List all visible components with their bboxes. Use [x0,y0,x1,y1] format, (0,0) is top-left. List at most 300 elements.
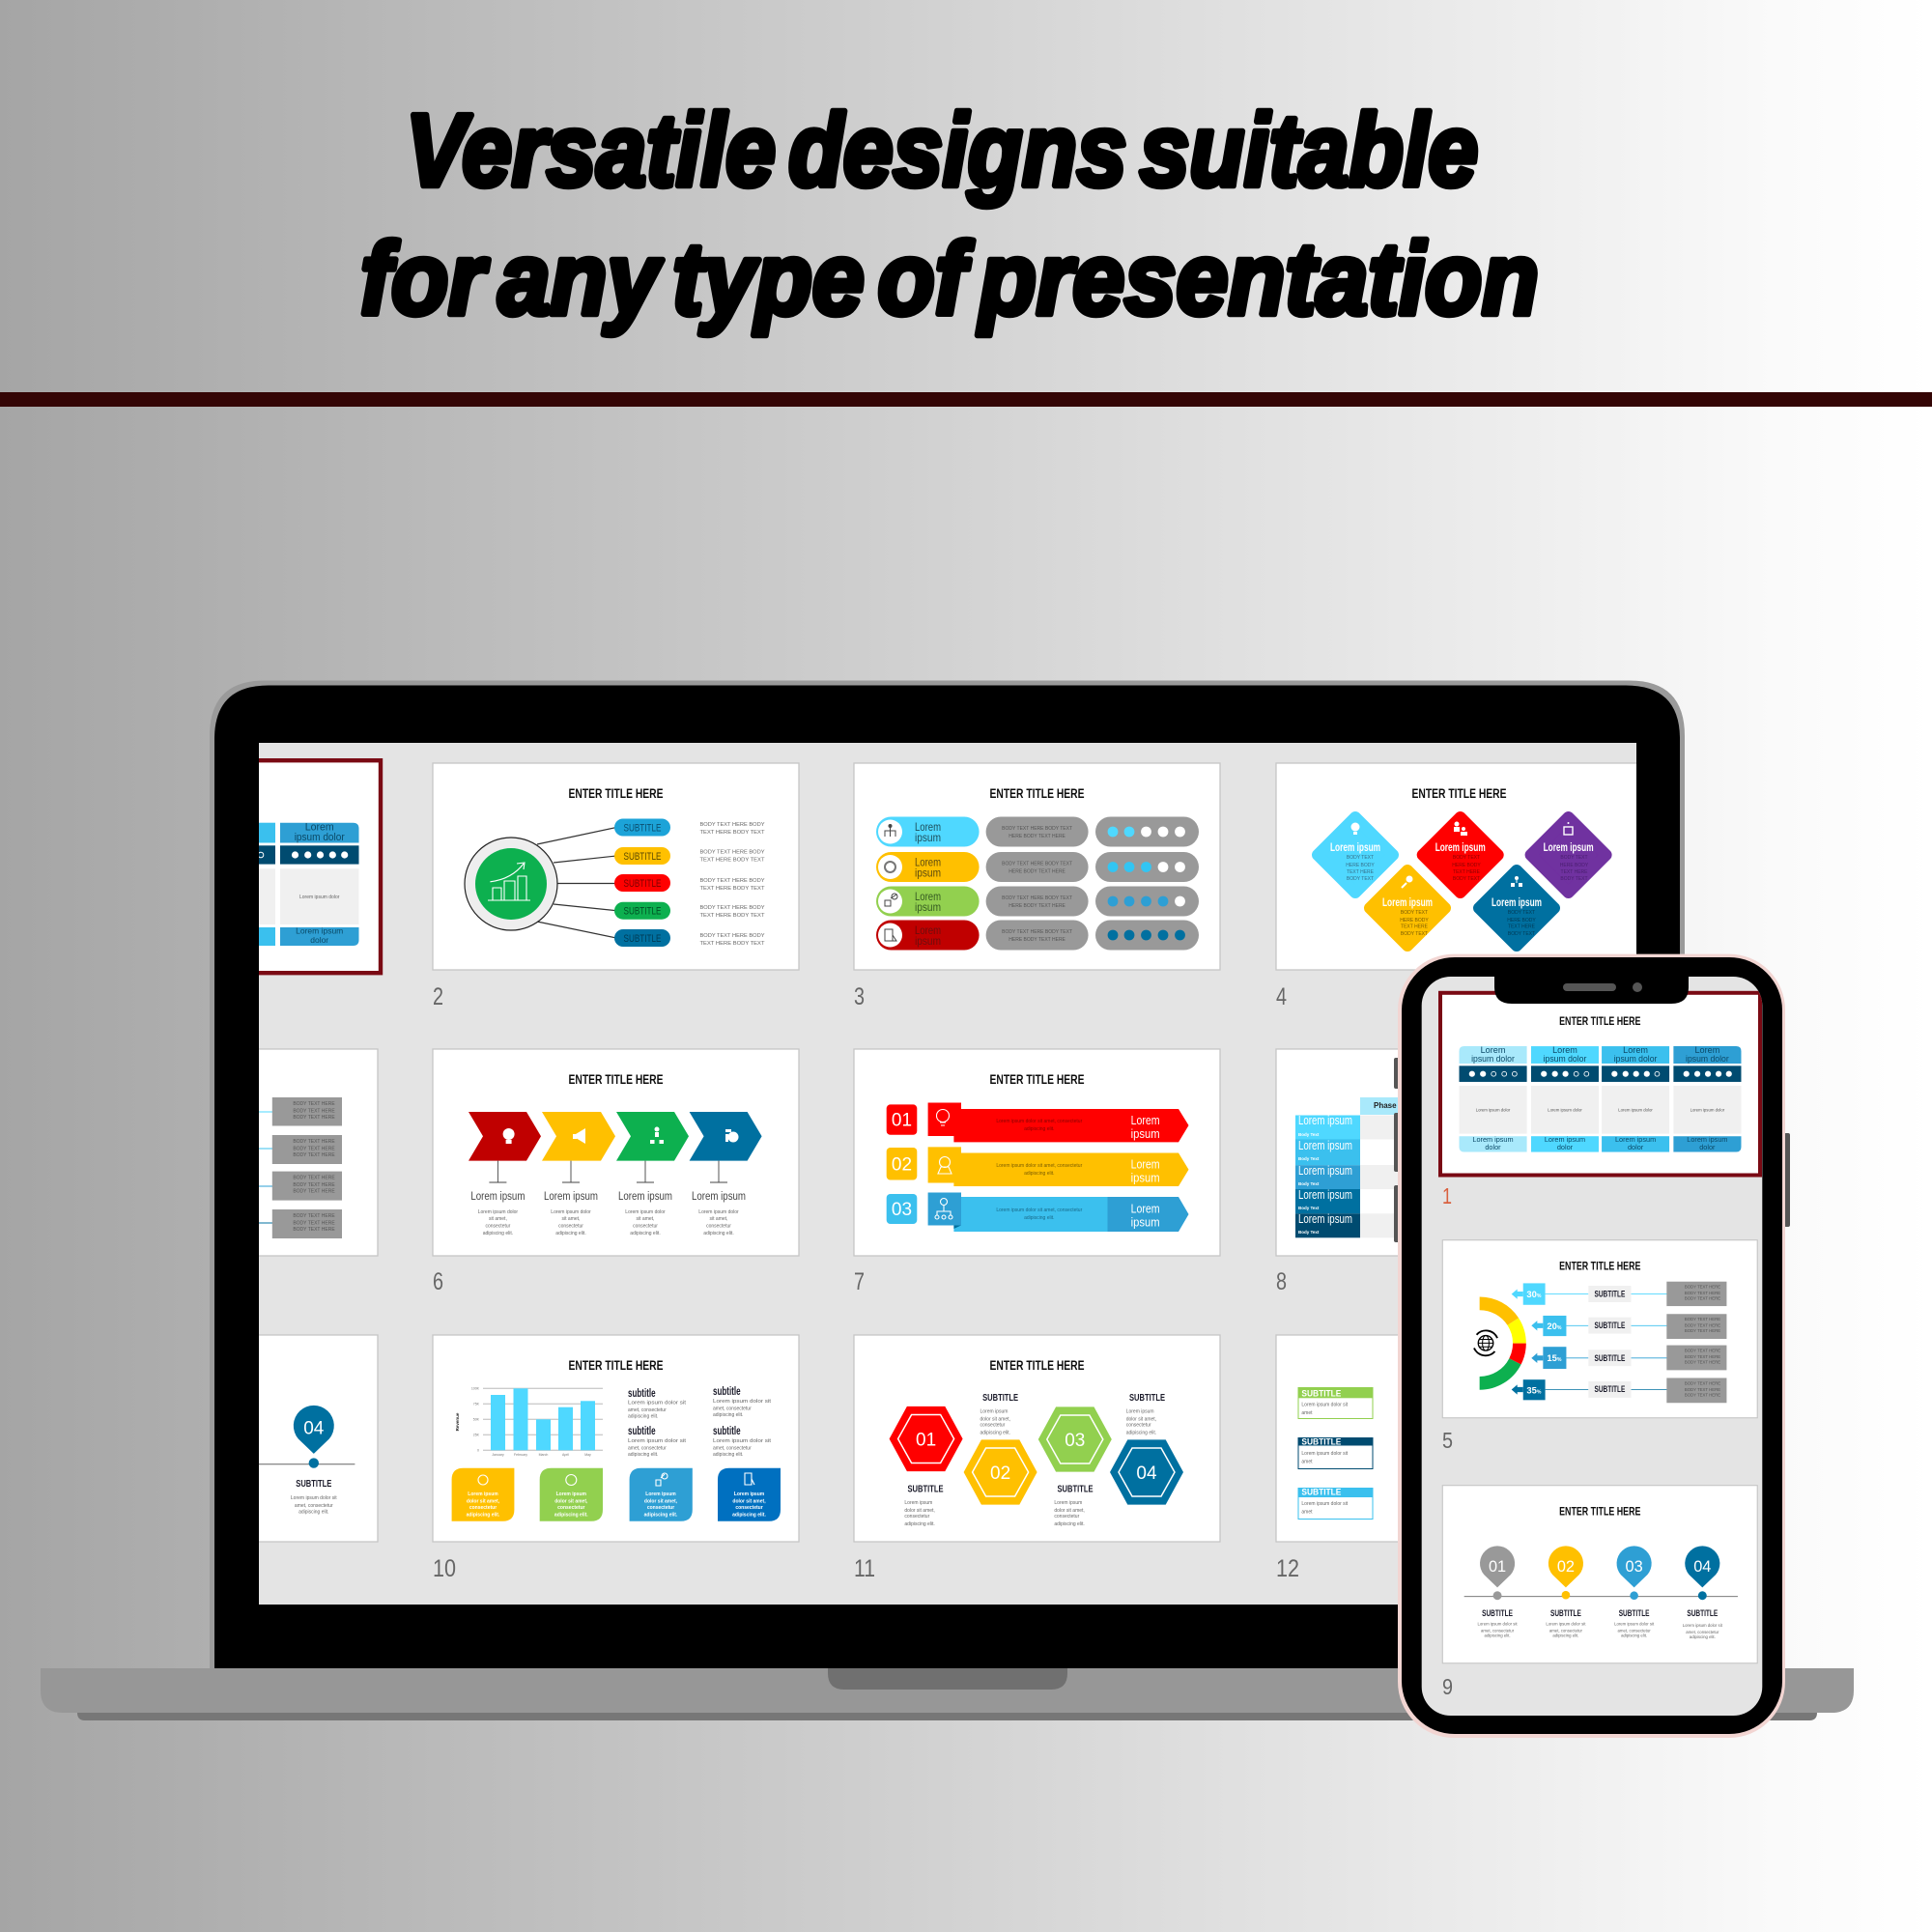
pin 02: amet, consectetur [1549,1628,1583,1633]
step 2 text: consectetur [558,1223,583,1229]
row 2: BODY TEXT HERE BODY TEXT [1002,862,1072,867]
phone slide number 9: 9 [1442,1674,1453,1699]
title: for any type of presentation [360,222,1539,336]
chevron row [469,1112,762,1161]
row labels: Body Text [1298,1181,1320,1186]
arrow 02 [887,1147,1188,1186]
step 4 text: adipiscing elit. [703,1231,734,1236]
subtitle text blocks: subtitle [628,1386,656,1400]
card blue: Lorem ipsum [645,1492,676,1497]
pin 01: SUBTITLE [1482,1608,1513,1618]
phone [1394,954,1790,1738]
hexagon 02: consectetur [980,1422,1006,1428]
box green: Lorem ipsum dolor sit [1301,1403,1349,1408]
subtitle pills: SUBTITLE [624,823,661,835]
arrow 03: Lorem ipsum dolor sit amet, consectetur [996,1208,1083,1213]
hexagon 02: 02 [990,1463,1010,1484]
row labels: Lorem ipsum [1298,1138,1352,1152]
body text [699,822,765,947]
pin 02: 02 [1557,1558,1575,1576]
hexagon 03: 03 [1065,1431,1085,1451]
laptop base lower strip [77,1713,1817,1720]
step 1 text: consectetur [485,1223,511,1229]
hexagon 02: dolor sit amet, [980,1416,1010,1422]
body text: TEXT HERE BODY TEXT [699,886,765,892]
hexagon 03: consectetur [1054,1514,1080,1520]
row 1: BODY TEXT HERE BODY TEXT [1002,826,1072,832]
hexagon 03: adipiscing elit. [1054,1521,1085,1527]
card yellow: consectetur [469,1505,497,1511]
pin 02: Lorem ipsum dolor sit [1546,1622,1586,1627]
pin 02: adipiscing elit. [1552,1634,1578,1638]
card yellow: dolor sit amet, [467,1499,500,1505]
diamond cyan: BODY TEXT [1347,855,1374,861]
subtitle pills: SUBTITLE [624,851,661,863]
arrow 01: Lorem [1131,1113,1160,1127]
column 2: Lorem ipsum [1545,1135,1585,1144]
bar chart: 0 [477,1449,479,1453]
pin 01: adipiscing elit. [1485,1634,1511,1638]
laptop bezel edge [210,680,1685,1668]
hexagon 04: Lorem ipsum [1126,1408,1154,1414]
column 2: dolor [1557,1143,1574,1151]
phone slide 5 [1442,1240,1757,1418]
diamond cyan [1318,817,1393,893]
row 2 [876,852,1199,882]
bar chart: 75K [473,1403,480,1406]
pin 01: 01 [1489,1558,1506,1576]
body text: TEXT HERE BODY TEXT [699,913,765,919]
row 1: Lorem [915,820,941,834]
selection border [259,758,383,976]
subtitle text blocks: Lorem ipsum dolor sit [628,1438,687,1444]
tag 15 percent: BODY TEXT HERE [1685,1354,1720,1359]
arrow 03: adipiscing elit. [1024,1215,1055,1221]
gray text boxes: BODY TEXT HERE [293,1109,335,1115]
card green: dolor sit amet, [554,1499,588,1505]
arrow 03: 03 [892,1200,912,1220]
phone slide 1 [1440,993,1760,1175]
pin 02 [1546,1546,1586,1638]
hexagon 03: SUBTITLE [1057,1484,1094,1495]
slide numbers: 12 [1276,1555,1299,1582]
body text: TEXT HERE BODY TEXT [699,941,765,947]
diamond cyan: BODY TEXT [1347,876,1374,882]
subtitle text blocks: amet, consectetur [713,1445,752,1451]
slide 10: chart and cards [433,1335,799,1542]
tag 20 percent [1531,1314,1726,1339]
card dark blue: dolor sit amet, [732,1499,766,1505]
slide numbers: 6 [433,1268,443,1295]
diamond blue: HERE BODY [1507,918,1536,923]
slide 9 partial: Lorem ipsum dolor sit [212,1497,258,1503]
column 1: ipsum dolor [1471,1054,1515,1065]
arrow 01: ipsum [1131,1126,1160,1141]
subtitle text blocks: Lorem ipsum dolor sit [628,1401,687,1406]
phone slide 9: ENTER TITLE HERE [1559,1506,1641,1519]
slide 10: chart and cards: ENTER TITLE HERE [568,1358,663,1373]
column 3 [259,823,275,946]
row 3: BODY TEXT HERE BODY TEXT [1002,895,1072,901]
card green: adipiscing elit. [554,1513,588,1519]
phone screen [1422,977,1762,1716]
diamond blue: BODY TEXT [1508,931,1535,937]
body text: BODY TEXT HERE BODY [699,822,765,828]
tag 35 percent: BODY TEXT HERE [1685,1387,1720,1392]
pin 04: amet, consectetur [295,1503,333,1509]
subtitle text blocks: adipiscing elit. [628,1452,658,1458]
phone pink edge [1398,954,1785,1738]
pin 01: Lorem ipsum dolor sit [1478,1622,1518,1627]
diamond yellow [1370,870,1445,946]
diamond cyan: TEXT HERE [1347,869,1375,875]
step 2 text: sit amet, [562,1216,580,1222]
diamond red: BODY TEXT [1453,855,1480,861]
tag 35 percent: BODY TEXT HERE [1685,1392,1720,1397]
semicircle gauge [1480,1303,1520,1383]
slide 7: numbered arrows: ENTER TITLE HERE [989,1072,1084,1087]
subtitle text blocks: subtitle [713,1384,741,1398]
arrow 02: Lorem [1131,1157,1160,1171]
diamond blue [1479,870,1554,946]
slide numbers: 4 [1276,983,1287,1010]
diamond yellow: BODY TEXT [1401,931,1428,937]
step 3 text [618,1191,672,1236]
column 4: Lorem ipsum dolor [1690,1107,1725,1112]
column 4: Lorem [1694,1045,1719,1056]
gray text boxes: BODY TEXT HERE [293,1146,335,1151]
row labels: Body Text [1298,1156,1320,1161]
hexagon 03 [1038,1406,1112,1527]
subtitle text blocks: subtitle [713,1424,741,1437]
column 4: ipsum dolor [295,832,345,843]
hexagon 04: SUBTITLE [1129,1392,1165,1404]
pin 01: amet, consectetur [1481,1628,1515,1633]
hexagon 01: dolor sit amet, [904,1508,935,1514]
column 3: ipsum dolor [1614,1054,1657,1065]
body text: TEXT HERE BODY TEXT [699,830,765,836]
slide 11: hexagons: ENTER TITLE HERE [989,1358,1084,1373]
arrow 01: adipiscing elit. [1024,1126,1055,1132]
subtitle pills: SUBTITLE [624,906,661,918]
row 3 [876,887,1199,916]
row 4: ipsum [915,934,941,948]
chevron icons [503,1126,738,1144]
arrow 01 [887,1103,1188,1142]
column 2: ipsum dolor [1544,1054,1586,1065]
diamond purple: HERE BODY [1560,863,1589,868]
box green: SUBTITLE [1301,1389,1341,1399]
pin 04 [1683,1546,1723,1639]
hexagon 01: adipiscing elit. [904,1521,935,1527]
pin 03: Lorem ipsum dolor sit [1614,1622,1655,1627]
column 2: Lorem ipsum dolor [1548,1107,1582,1112]
step 2 text [544,1191,598,1236]
diamond red: BODY TEXT [1453,876,1480,882]
step 1 text [470,1191,525,1236]
slide 3: rating pills: ENTER TITLE HERE [989,786,1084,801]
column 4: Lorem [305,821,334,833]
column 4 [280,821,359,946]
gray text boxes: BODY TEXT HERE [293,1182,335,1188]
column 3: Lorem ipsum [1615,1135,1656,1144]
pin 04: 04 [1693,1558,1711,1576]
column 4: Lorem ipsum [296,925,343,935]
card yellow: adipiscing elit. [467,1513,500,1519]
laptop trackpad notch [828,1668,1067,1690]
slide 2: hub and spokes [433,763,799,970]
bar chart: 25K [473,1434,480,1437]
diamond blue: BODY TEXT [1508,910,1535,916]
subtitle text blocks: amet, consectetur [628,1445,667,1451]
bar chart: May [584,1453,591,1457]
row 4: Lorem [915,923,941,937]
hexagon 04: 04 [1136,1463,1157,1484]
arrow 03: ipsum [1131,1215,1160,1229]
step 2 text: Lorem ipsum dolor [551,1209,591,1215]
column 4: dolor [310,935,328,945]
phone slide 1: ENTER TITLE HERE [1559,1015,1641,1028]
tag 15 percent: BODY TEXT HERE [1685,1359,1720,1364]
box navy [1298,1437,1373,1468]
pin 03: SUBTITLE [1619,1608,1650,1618]
slide 6: chevrons [433,1049,799,1256]
slide 9 partial [12,1335,378,1542]
tag 30 percent: BODY TEXT HERE [1685,1291,1720,1295]
pin 03: 03 [1626,1558,1643,1576]
hexagon 04 [1110,1392,1183,1505]
hexagon 03: dolor sit amet, [1054,1508,1085,1514]
pin 04: Lorem ipsum dolor sit [1683,1623,1723,1628]
step 3 text: adipiscing elit. [630,1231,661,1236]
column 1: Lorem ipsum [1472,1135,1514,1144]
card yellow: Lorem ipsum [468,1492,498,1497]
column 1: Lorem ipsum dolor [1476,1107,1511,1112]
card blue [630,1468,693,1521]
phase header [1360,1097,1418,1115]
step 3 text: Lorem ipsum [618,1191,672,1203]
gray text boxes: BODY TEXT HERE [293,1175,335,1180]
diamond purple: Lorem ipsum [1544,842,1594,854]
arrow 01: 01 [892,1111,912,1130]
hexagon 02: SUBTITLE [982,1392,1018,1404]
step 4 text: sit amet, [710,1216,727,1222]
bar chart: April [562,1453,569,1457]
box cyan: Lorem ipsum dolor sit [1301,1501,1349,1507]
pin 01 [1478,1546,1518,1638]
column 4 [1673,1045,1741,1152]
hexagon 01: consectetur [904,1514,930,1520]
pin 03: amet, consectetur [1618,1628,1651,1633]
hub circle [465,838,557,930]
slide 5 partial [12,1049,378,1256]
slide 12: subtitle boxes [1276,1335,1642,1542]
card blue: adipiscing elit. [644,1513,678,1519]
hexagon 04: consectetur [1126,1422,1151,1428]
tag 20 percent: BODY TEXT HERE [1685,1323,1720,1328]
slide numbers: 3 [854,983,865,1010]
diamond yellow: BODY TEXT [1401,910,1428,916]
column 2: Lorem [1552,1045,1577,1056]
column 3: Lorem [1623,1045,1648,1056]
diamond red [1423,817,1498,893]
column 3 [1602,1045,1669,1152]
phone slide number 5: 5 [1442,1428,1453,1453]
laptop base [41,1668,1854,1713]
pin 04: Lorem ipsum dolor sit [291,1495,337,1501]
phone side buttons [1394,1058,1790,1242]
divider band [0,392,1932,407]
tag 30 percent: SUBTITLE [1595,1290,1625,1299]
gray text boxes: BODY TEXT HERE [293,1101,335,1107]
step 2 text: adipiscing elit. [555,1231,586,1236]
box navy: amet [1301,1459,1313,1464]
subtitle pills: SUBTITLE [624,933,661,945]
slide 2: hub and spokes: ENTER TITLE HERE [568,786,663,801]
row 2: HERE BODY TEXT HERE [1009,869,1066,875]
row labels: Body Text [1298,1206,1320,1210]
row labels: Lorem ipsum [1298,1113,1352,1127]
tag 20 percent: BODY TEXT HERE [1685,1328,1720,1333]
tag 20 percent: 20% [1547,1321,1562,1332]
subtitle text blocks: amet, consectetur [628,1407,667,1413]
card yellow [452,1468,514,1521]
box green: amet [1301,1410,1313,1416]
column 4: ipsum dolor [1686,1054,1729,1065]
phone notch [1494,971,1689,1004]
subtitle text blocks: amet, consectetur [713,1406,752,1412]
slide numbers: 2 [433,983,443,1010]
row 2: ipsum [915,866,941,879]
subtitle text blocks [628,1384,772,1458]
hexagon 02: adipiscing elit. [980,1430,1010,1435]
pin 03 [1614,1546,1655,1638]
subtitle text blocks: Lorem ipsum dolor sit [713,1438,772,1444]
arrow 02: 02 [892,1155,912,1175]
tag 20 percent: BODY TEXT HERE [1685,1317,1720,1321]
pin 04 [291,1406,337,1515]
step 1 text: Lorem ipsum [470,1191,525,1203]
row 1: HERE BODY TEXT HERE [1009,834,1066,839]
tag 15 percent: BODY TEXT HERE [1685,1348,1720,1352]
subtitle text blocks: subtitle [628,1424,656,1437]
hexagon 02 [964,1392,1037,1505]
bar chart: Revenue [455,1412,460,1431]
diamond red: TEXT HERE [1453,869,1481,875]
connector lines [231,1112,272,1223]
title: Versatile designs suitable [406,94,1478,208]
diamond yellow: TEXT HERE [1401,923,1429,929]
row labels: Lorem ipsum [1298,1163,1352,1178]
diamond yellow: HERE BODY [1400,918,1429,923]
phone slide number 1: 1 [1442,1183,1452,1208]
body text: BODY TEXT HERE BODY [699,933,765,939]
slide 4: diamonds [1276,763,1642,970]
slide 7: numbered arrows [854,1049,1220,1256]
column 4: dolor [1699,1143,1716,1151]
column 1 [1459,1045,1527,1152]
box cyan: amet [1301,1509,1313,1515]
step 3 text: consectetur [633,1223,658,1229]
diamond yellow: Lorem ipsum [1382,897,1433,909]
camera [1633,982,1642,992]
laptop [8,680,1854,1720]
slide numbers: 7 [854,1268,865,1295]
row 1: ipsum [915,831,941,844]
hexagon 01: Lorem ipsum [904,1500,932,1506]
step 4 text: Lorem ipsum [692,1191,746,1203]
column 1: dolor [1485,1143,1501,1151]
tag 15 percent: 15% [1547,1353,1562,1364]
column 1: Lorem [1481,1045,1506,1056]
gray text boxes: BODY TEXT HERE [293,1227,335,1233]
subtitle text blocks: adipiscing elit. [628,1414,658,1420]
arrow 02: Lorem ipsum dolor sit amet, consectetur [996,1163,1083,1169]
subtitle pills [614,819,670,947]
step 4 text: consectetur [706,1223,731,1229]
column 3: dolor [1628,1143,1644,1151]
diamond cyan: Lorem ipsum [1330,842,1380,854]
tag 15 percent: SUBTITLE [1595,1353,1625,1363]
phase header: Phase [1374,1101,1397,1110]
table cells [1360,1115,1418,1237]
hexagon 03: Lorem ipsum [1054,1500,1082,1506]
title [360,94,1539,336]
tag 30 percent: 30% [1526,1290,1542,1300]
row labels: Body Text [1298,1230,1320,1235]
step 1 text: adipiscing elit. [483,1231,513,1236]
arrow 03 [887,1192,1188,1232]
bar chart [455,1387,603,1457]
laptop slide grid [8,760,1642,1582]
arrow 01: Lorem ipsum dolor sit amet, consectetur [996,1119,1083,1124]
slide 11: hexagons [854,1335,1220,1542]
slide 8: phase table [1276,1049,1642,1256]
tag 30 percent [1512,1282,1726,1306]
arrow 02: ipsum [1131,1171,1160,1184]
body text: TEXT HERE BODY TEXT [699,858,765,864]
pin 04: adipiscing elit. [1690,1634,1716,1639]
hexagon 04: dolor sit amet, [1126,1416,1156,1422]
phone slides [1440,993,1760,1699]
column 4: Lorem ipsum [1687,1135,1727,1144]
subtitle pills: SUBTITLE [624,878,661,890]
card green: consectetur [557,1505,585,1511]
tag 35 percent [1512,1378,1726,1403]
box green [1298,1387,1373,1418]
tag 35 percent: SUBTITLE [1595,1384,1625,1394]
step 1 text: sit amet, [489,1216,507,1222]
arrow 03: Lorem [1131,1202,1160,1215]
card dark blue: Lorem ipsum [734,1492,765,1497]
row 4: HERE BODY TEXT HERE [1009,937,1066,943]
arrow 02: adipiscing elit. [1024,1171,1055,1177]
gray text boxes: BODY TEXT HERE [293,1115,335,1121]
card green [540,1468,603,1521]
card green: Lorem ipsum [556,1492,587,1497]
bar chart: 50K [473,1418,480,1422]
tag 30 percent: BODY TEXT HERE [1685,1285,1720,1290]
pin 03: adipiscing elit. [1621,1634,1647,1638]
slide numbers [433,983,1299,1582]
hexagon 04: adipiscing elit. [1126,1430,1156,1435]
card dark blue [718,1468,781,1521]
gray text boxes: BODY TEXT HERE [293,1221,335,1227]
step 1 text: Lorem ipsum dolor [478,1209,518,1215]
row labels [1295,1113,1360,1237]
slide numbers: 11 [854,1555,875,1582]
subtitle text blocks: adipiscing elit. [713,1412,743,1418]
